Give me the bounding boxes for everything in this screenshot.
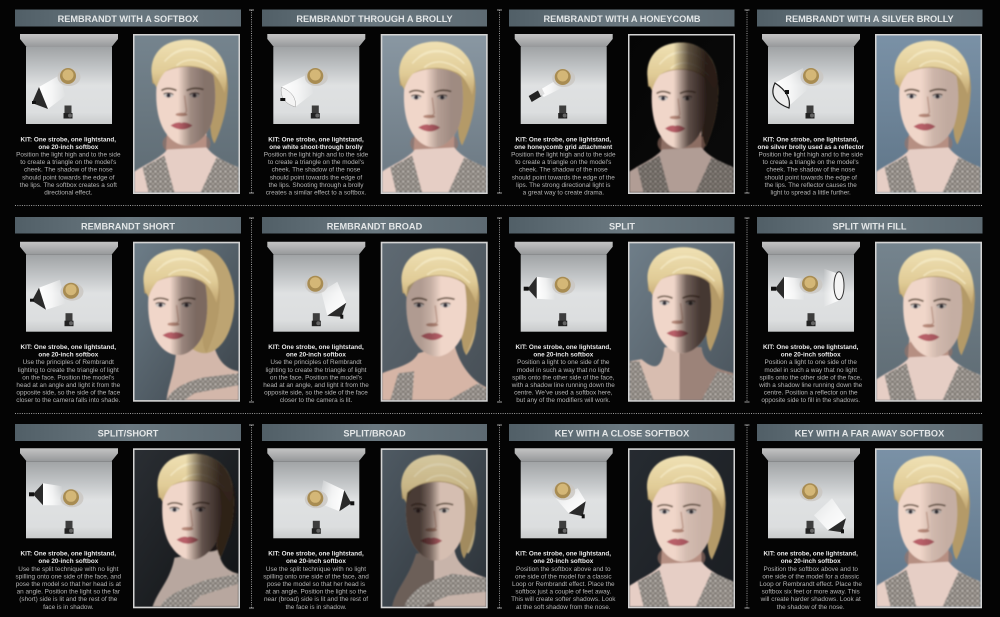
text: kit and instructions: to create a triangle on the model's bbox=[268, 159, 364, 166]
text: kit and instructions: one 20-inch softbox bbox=[286, 352, 346, 359]
text: kit and instructions: softbox just a couple of feet away. bbox=[515, 589, 611, 596]
heading: split bbox=[509, 217, 734, 234]
heading: split/short: SPLIT/SHORT bbox=[98, 428, 159, 438]
text: kit and instructions: KIT: One strobe, one lightstand, bbox=[763, 136, 859, 143]
photo: portrait bbox=[381, 34, 488, 194]
text: kit and instructions: Loop or Rembrandt effect. Place the bbox=[759, 581, 862, 588]
panel: rembrandt short bbox=[15, 217, 241, 404]
text: kit and instructions: Position the light high and to the side bbox=[758, 152, 863, 158]
text: kit and instructions: Position the light high and to the side bbox=[264, 152, 369, 158]
photo: portrait bbox=[133, 448, 240, 608]
text: kit and instructions: Position the light high and to the side bbox=[511, 152, 616, 158]
panel: split/short bbox=[15, 424, 241, 611]
heading: rembrandt with a softbox bbox=[15, 10, 241, 26]
diagram: softbox far, lower right bbox=[762, 448, 860, 538]
text: kit and instructions: Use the principles of Rembrandt bbox=[270, 359, 362, 366]
text: kit and instructions: centre. We've used a softbox here, bbox=[514, 390, 613, 397]
diagram: softbox left, reflector right bbox=[762, 242, 860, 332]
photo: portrait bbox=[628, 448, 735, 608]
diagram: softbox side-on left bbox=[515, 242, 613, 332]
diagram: softbox left of model bbox=[20, 34, 118, 124]
text: kit and instructions: opposite side, so the side of the face bbox=[264, 390, 368, 397]
text: kit and instructions: light to spread a little further. bbox=[771, 190, 851, 196]
text: kit and instructions: Use the split technique with no light bbox=[18, 566, 119, 573]
text: kit and instructions: near (broad) side is lit and the rest of bbox=[264, 596, 368, 603]
text: kit and instructions: spilling onto one side of the face, and bbox=[263, 573, 369, 580]
text: kit and instructions: (short) side is lit and the rest of the bbox=[19, 596, 118, 603]
text: kit and instructions: lips. The strong directional light is bbox=[516, 182, 610, 189]
photo: portrait bbox=[875, 34, 982, 194]
text: kit and instructions: one white shoot-through brolly bbox=[269, 144, 363, 151]
text: kit and instructions: cheek. The shadow of the nose bbox=[272, 167, 361, 174]
diagram: silver brolly reflector bbox=[762, 34, 860, 124]
text: kit and instructions: spills onto the other side of the face, bbox=[512, 374, 615, 381]
text: kit and instructions: on the face. Position the model's bbox=[22, 374, 114, 381]
photo: portrait bbox=[133, 242, 240, 402]
photo: portrait bbox=[628, 34, 735, 194]
heading: split/broad: SPLIT/BROAD bbox=[343, 428, 406, 438]
heading: split/broad bbox=[262, 424, 487, 441]
text: kit and instructions: Position the softbox above and to bbox=[763, 566, 858, 573]
photo: portrait bbox=[875, 242, 982, 402]
text: kit and instructions: head at an angle and light it from the bbox=[16, 382, 121, 389]
text: kit and instructions: one honeycomb grid attachment bbox=[514, 144, 613, 151]
text: kit and instructions: Position the softbox above and to bbox=[516, 566, 611, 573]
text: kit and instructions: face is in shadow. bbox=[43, 604, 94, 611]
panel: rembrandt broad bbox=[262, 217, 488, 404]
panel: split with fill bbox=[757, 217, 982, 404]
text: kit and instructions: at an angle. Position the light so the bbox=[265, 589, 367, 596]
panel: rembrandt with a silver brolly bbox=[757, 10, 982, 196]
text: kit and instructions: one 20-inch softbox bbox=[533, 558, 594, 565]
text: kit and instructions: Position a light to one side of the bbox=[517, 359, 610, 366]
panel: key with a far away softbox bbox=[757, 424, 982, 611]
text: kit and instructions: Loop or Rembrandt effect. Place the bbox=[512, 581, 615, 588]
text: kit and instructions: Position the light high and to the side bbox=[16, 152, 121, 158]
text: kit and instructions: KIT: One strobe, one lightstand, bbox=[268, 136, 364, 143]
text: kit and instructions: should point towards the edge of bbox=[270, 174, 362, 181]
diagram: softbox left, head turned bbox=[20, 242, 118, 332]
panel: rembrandt with a softbox bbox=[15, 10, 241, 196]
heading: split/short bbox=[15, 424, 241, 441]
text: kit and instructions: cheek. The shadow of the nose bbox=[24, 167, 113, 174]
text: kit and instructions: with a shadow line running down the bbox=[758, 382, 863, 389]
heading: key with a far away softbox: KEY WITH A FAR AWAY SOFTBOX bbox=[795, 428, 945, 438]
text: kit and instructions: should point towards the edge of bbox=[22, 174, 115, 181]
text: kit and instructions: but any of the modifiers will work. bbox=[516, 397, 611, 404]
panel: split/broad bbox=[262, 424, 488, 611]
text: kit and instructions: KIT: One strobe, one lightstand, bbox=[21, 551, 116, 558]
photo: portrait bbox=[381, 242, 488, 402]
text: kit and instructions: one 20-inch softbox bbox=[38, 558, 99, 565]
panel: key with a close softbox bbox=[509, 424, 735, 611]
heading: rembrandt with a softbox: REMBRANDT WITH A SOFTBOX bbox=[58, 14, 199, 24]
heading: split with fill: SPLIT WITH FILL bbox=[832, 221, 907, 231]
text: kit and instructions: This will create softer shadows. Look bbox=[511, 596, 616, 603]
text: kit and instructions: the face is in shadow. bbox=[285, 604, 347, 611]
text: kit and instructions: lighting to create the triangle of light bbox=[266, 367, 367, 374]
text: kit and instructions: one side of the model for a classic bbox=[762, 573, 860, 580]
text: kit and instructions: to create a triangle on the model's bbox=[515, 159, 611, 166]
heading: rembrandt short bbox=[15, 217, 241, 234]
text: kit and instructions: spills onto the other side of the face, bbox=[760, 374, 862, 381]
heading: rembrandt short: REMBRANDT SHORT bbox=[81, 221, 175, 231]
photo: portrait bbox=[875, 448, 982, 608]
text: kit and instructions: KIT: One strobe, one lightstand, bbox=[21, 136, 116, 143]
heading: key with a close softbox bbox=[509, 424, 734, 441]
text: kit and instructions: opposite side to fill in the shadows. bbox=[761, 397, 860, 404]
heading: rembrandt with a honeycomb bbox=[509, 10, 734, 26]
panel: rembrandt with a honeycomb bbox=[509, 10, 735, 196]
text: kit and instructions: softbox six feet or more away. This bbox=[762, 589, 860, 596]
text: kit and instructions: on the face. Position the model's bbox=[270, 374, 362, 381]
text: kit and instructions: to create a triangle on the model's bbox=[763, 159, 859, 166]
text: kit and instructions: KIT: One strobe, one lightstand, bbox=[268, 551, 364, 558]
diagram: honeycomb grid left of model bbox=[515, 34, 613, 124]
heading: key with a close softbox: KEY WITH A CLOSE SOFTBOX bbox=[555, 428, 690, 438]
text: kit and instructions: with a shadow line running down the bbox=[511, 382, 615, 389]
diagram: white brolly left of model bbox=[267, 34, 365, 124]
text: kit and instructions: one side of the model for a classic bbox=[515, 573, 612, 580]
text: kit and instructions: lighting to create the triangle of light bbox=[18, 367, 119, 374]
diagram: softbox close, lower right bbox=[515, 448, 613, 538]
text: kit and instructions: creates a similar effect to a softbox. bbox=[266, 190, 366, 196]
text: kit and instructions: one silver brolly used as a reflector bbox=[757, 144, 864, 151]
text: kit and instructions: KIT: one strobe, one lightstand, bbox=[763, 551, 858, 558]
photo: portrait bbox=[628, 242, 735, 402]
text: kit and instructions: the lips. The softbox creates a soft bbox=[20, 182, 117, 189]
text: kit and instructions: directional effect. bbox=[44, 190, 93, 196]
diagram: softbox left, head turned bbox=[20, 448, 118, 538]
text: kit and instructions: KIT: One strobe, one lightstand, bbox=[21, 344, 116, 351]
text: kit and instructions: one 20-inch softbox bbox=[38, 352, 99, 359]
text: kit and instructions: centre. Position a reflector on the bbox=[764, 390, 858, 397]
text: kit and instructions: spilling onto one side of the face, and bbox=[16, 573, 122, 580]
heading: rembrandt with a honeycomb: REMBRANDT WITH A HONEYCOMB bbox=[543, 14, 701, 24]
text: kit and instructions: should point towards the edge of the bbox=[512, 174, 615, 181]
text: kit and instructions: the lips. The reflector causes the bbox=[765, 182, 857, 189]
text: kit and instructions: closer to the camera falls into shade. bbox=[16, 397, 121, 404]
text: kit and instructions: model in such a way that no light bbox=[764, 367, 857, 374]
heading: rembrandt with a silver brolly bbox=[757, 10, 982, 26]
text: kit and instructions: the lips. Shooting through a brolly bbox=[269, 182, 364, 189]
heading: rembrandt broad bbox=[262, 217, 487, 234]
text: kit and instructions: one 20-inch softbox bbox=[781, 558, 841, 565]
panel: rembrandt through a brolly bbox=[262, 10, 488, 196]
photo: portrait bbox=[133, 34, 240, 194]
text: kit and instructions: one 20-inch softbox bbox=[533, 352, 594, 359]
text: kit and instructions: pose the model so that her head is bbox=[267, 581, 365, 588]
text: kit and instructions: KIT: One strobe, one lightstand, bbox=[763, 344, 859, 351]
photo: portrait bbox=[381, 448, 488, 608]
text: kit and instructions: one 20-inch softbox bbox=[38, 144, 99, 151]
text: kit and instructions: opposite side, so the side of the face bbox=[16, 390, 121, 397]
text: kit and instructions: an angle. Position the light so the far bbox=[17, 589, 121, 596]
heading: rembrandt through a brolly: REMBRANDT THROUGH A BROLLY bbox=[296, 14, 453, 24]
text: kit and instructions: cheek. The shadow of the nose bbox=[519, 167, 608, 174]
text: kit and instructions: KIT: One strobe, one lightstand, bbox=[516, 136, 611, 143]
text: kit and instructions: cheek. The shadow of the nose bbox=[766, 167, 855, 174]
text: kit and instructions: Position a light to one side of the bbox=[765, 359, 857, 366]
text: kit and instructions: model in such a way that no light bbox=[517, 367, 610, 374]
text: kit and instructions: closer to the camera is lit. bbox=[280, 397, 352, 404]
text: kit and instructions: at the soft shadow from the nose. bbox=[516, 604, 611, 611]
text: kit and instructions: one 20-inch softbox bbox=[781, 352, 841, 359]
heading: split: SPLIT bbox=[609, 221, 635, 231]
text: kit and instructions: Use the split technique with no light bbox=[266, 566, 366, 573]
heading: split with fill bbox=[757, 217, 982, 234]
text: kit and instructions: KIT: One strobe, one lightstand, bbox=[516, 344, 611, 351]
text: kit and instructions: one 20-inch softbox bbox=[286, 558, 346, 565]
text: kit and instructions: KIT: One strobe, one lightstand, bbox=[268, 344, 364, 351]
text: kit and instructions: to create a triangle on the model's bbox=[20, 159, 116, 166]
text: kit and instructions: Use the principles of Rembrandt bbox=[23, 359, 114, 366]
text: kit and instructions: a great way to create drama. bbox=[523, 190, 604, 196]
text: kit and instructions: should point towards the edge of bbox=[765, 174, 857, 181]
panel: split bbox=[509, 217, 735, 404]
text: kit and instructions: pose the model so that her head is at bbox=[16, 581, 121, 588]
text: kit and instructions: KIT: One strobe, one lightstand, bbox=[516, 551, 611, 558]
heading: key with a far away softbox bbox=[757, 424, 982, 441]
heading: rembrandt broad: REMBRANDT BROAD bbox=[327, 221, 423, 231]
heading: rembrandt through a brolly bbox=[262, 10, 487, 26]
text: kit and instructions: the shadow of the nose. bbox=[777, 604, 845, 611]
diagram: softbox lower right bbox=[267, 242, 365, 332]
text: kit and instructions: will create harder shadows. Look at bbox=[760, 596, 861, 603]
heading: rembrandt with a silver brolly: REMBRANDT WITH A SILVER BROLLY bbox=[785, 14, 954, 24]
diagram: softbox right of model bbox=[267, 448, 365, 538]
text: kit and instructions: head at an angle, and light it from the bbox=[263, 382, 369, 389]
